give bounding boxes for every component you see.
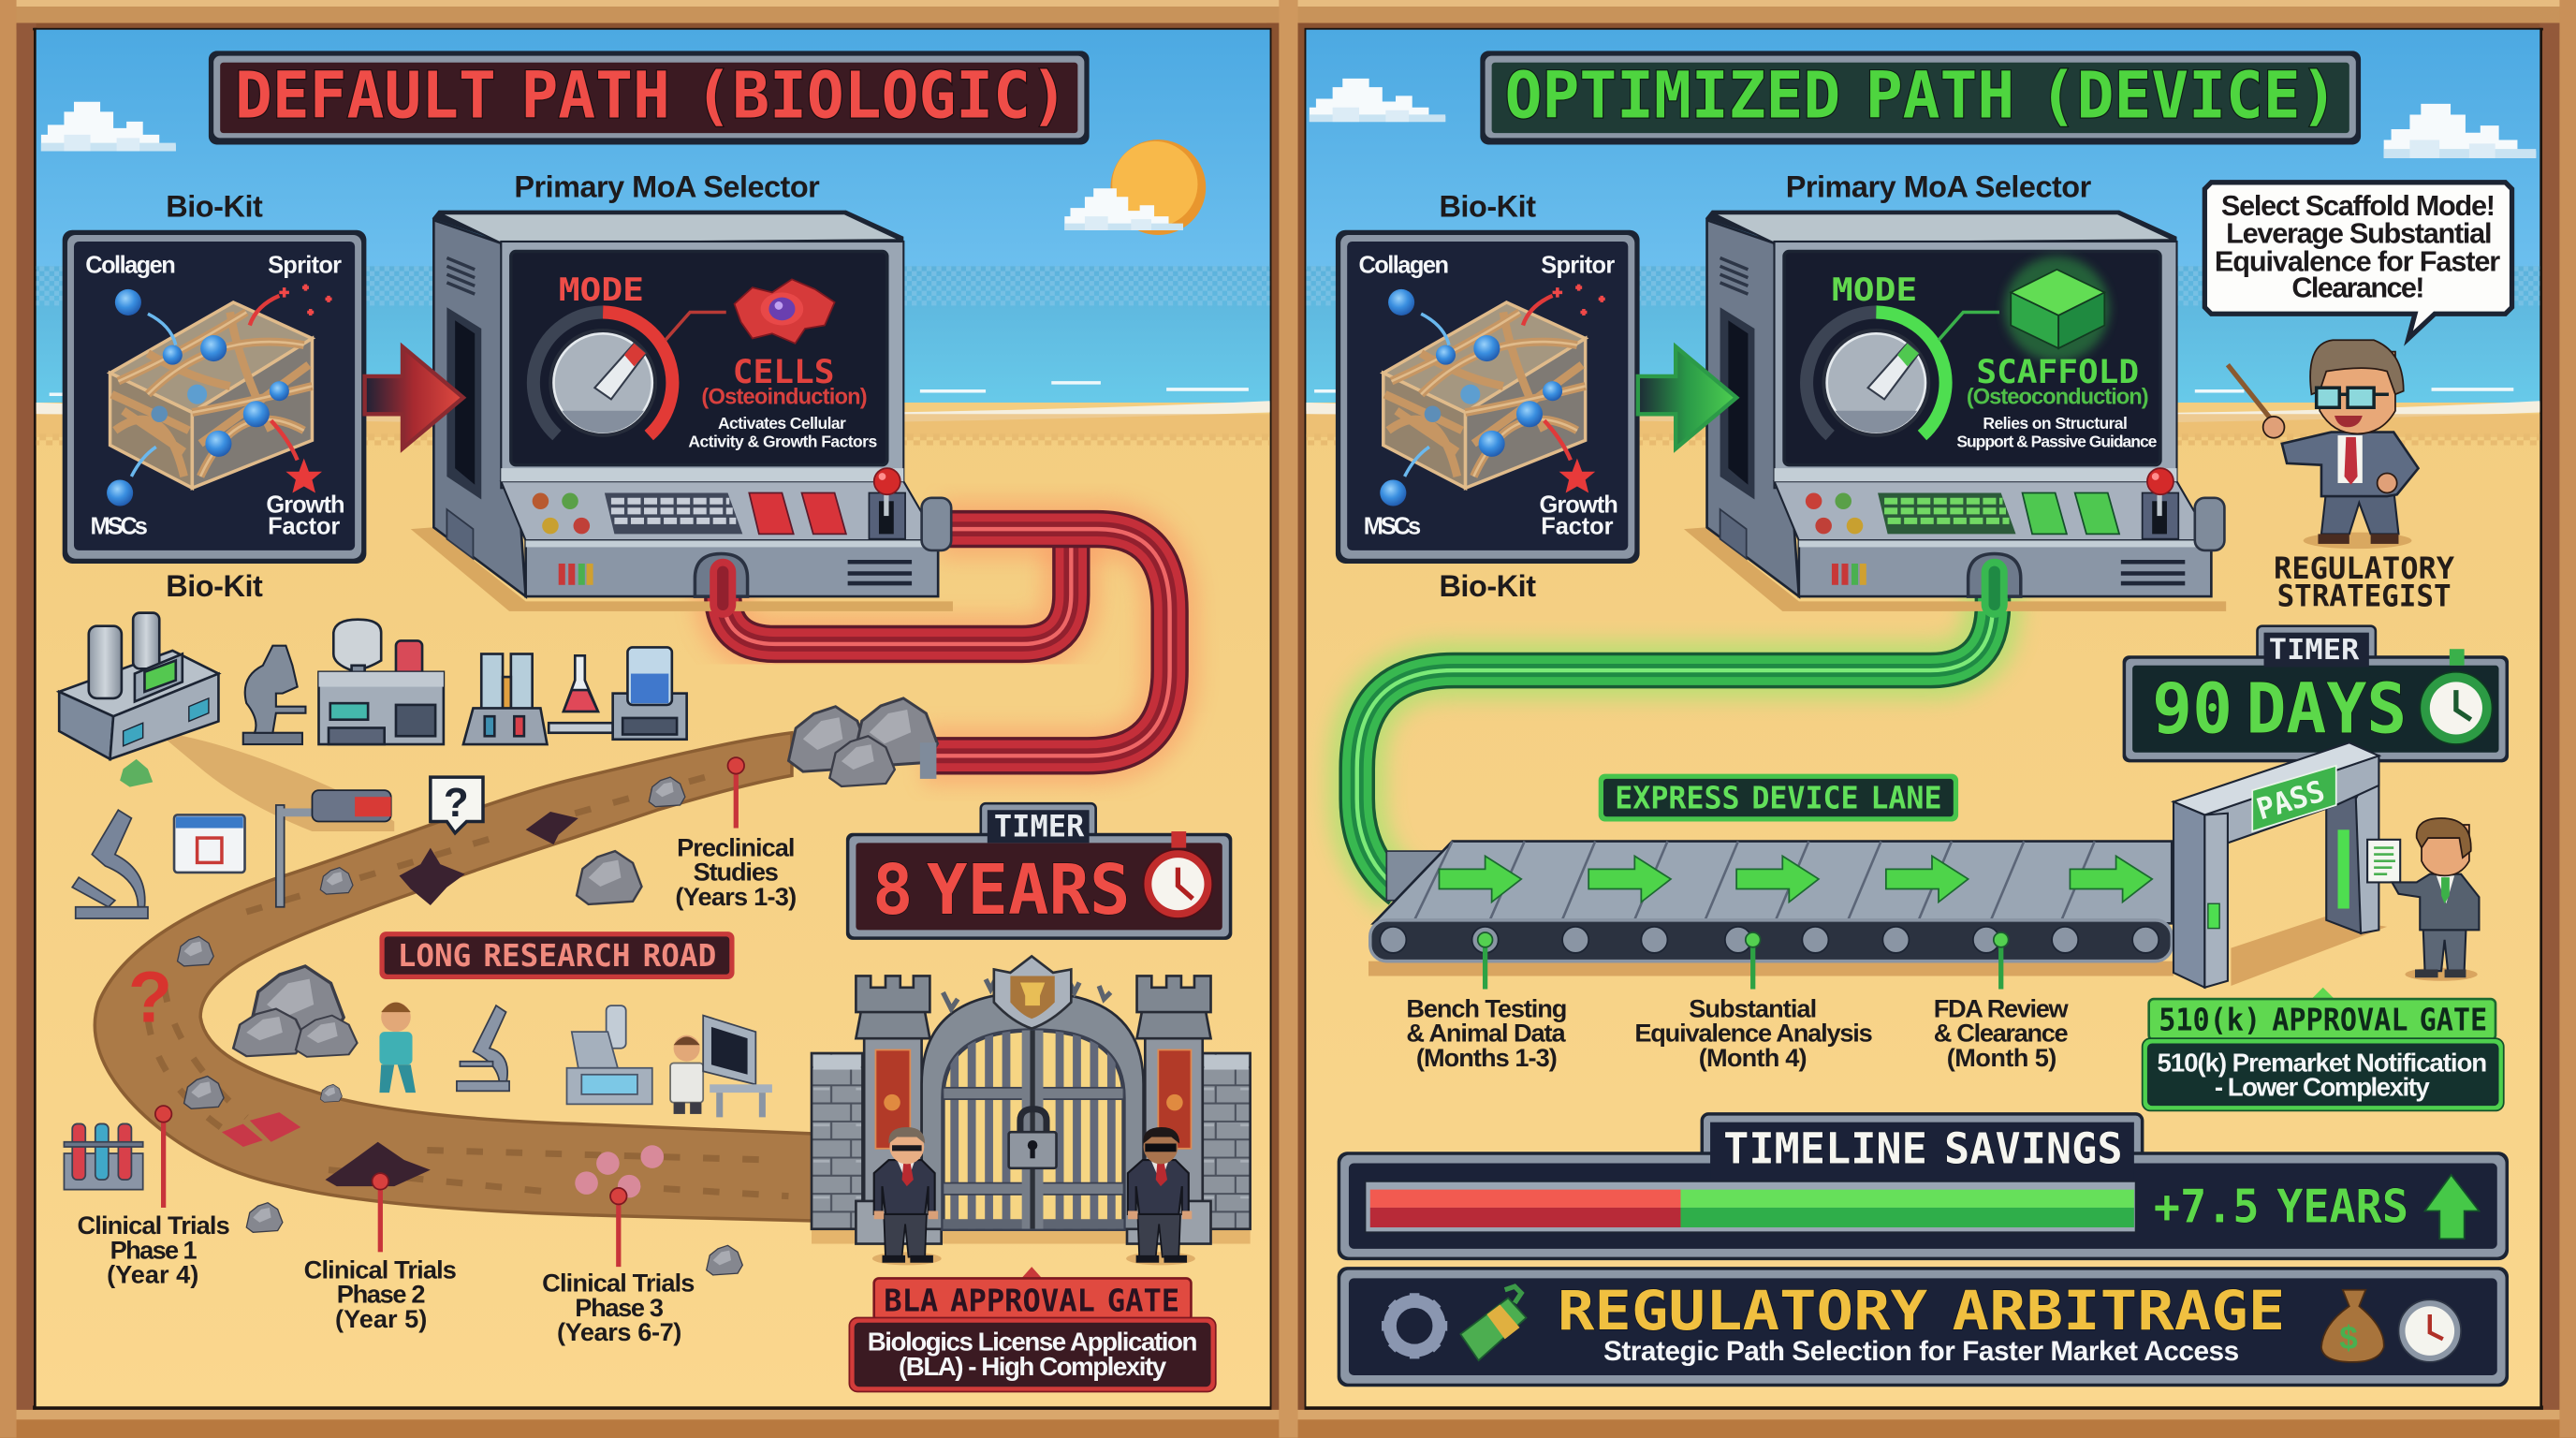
panel: bio-kit components: [63, 230, 366, 564]
panel: optimized path (device): [1306, 30, 2539, 1413]
milestone: equivalence: [1634, 932, 1873, 1072]
callout: strategist speech bubble: Equivalence for Faster: [2215, 245, 2500, 278]
label: 510(k) approval gate: 510(k) APPROVAL GATE: [2159, 1001, 2487, 1037]
arrow: kit to selector green: [1638, 346, 1736, 448]
callout: 510(k) description: - Lower Complexity: [2215, 1073, 2430, 1102]
milestone: equivalence: Substantial: [1689, 993, 1817, 1022]
timer: 8 years: 8 YEARS: [872, 851, 1131, 931]
callout: strategist speech bubble: [2204, 183, 2512, 339]
milestone: FDA review: & Clearance: [1934, 1019, 2069, 1048]
pipe: green tubing: [1357, 575, 1993, 890]
background: sand: [37, 401, 1270, 1413]
screen: Osteoconduction: (Osteoconduction): [1967, 386, 2149, 410]
milestone: phase 2: Phase 2: [337, 1280, 426, 1309]
icon: robotic instrument: [567, 1005, 652, 1104]
milestone: phase 1: (Year 4): [107, 1260, 198, 1289]
panel: bio-kit components: [1336, 230, 1640, 564]
icon: researcher in teal scrubs: [379, 1003, 416, 1093]
label: BLA approval gate: [874, 1267, 1191, 1321]
icon: green stopwatch: [2420, 649, 2492, 744]
screen: Osteoinduction: (Osteoinduction): [701, 386, 868, 410]
small rocks: [178, 777, 742, 1275]
screen: dial arc: [534, 312, 726, 435]
panel: bio-kit components: Spritor: [1541, 252, 1615, 278]
panel: bio-kit components: Growth: [1540, 492, 1618, 519]
controls: lights, keyboard, buttons: [1806, 493, 2119, 534]
icon: green scaffold cube: [2004, 257, 2110, 361]
conveyor arrows: [1439, 856, 2152, 902]
label: Bio-Kit top: Bio-Kit: [166, 190, 263, 224]
icon: question speech bubble: [431, 777, 483, 833]
machine: primary MoA selector (biologic): [411, 211, 953, 611]
controls: lights, keyboard, buttons: [533, 493, 846, 534]
milestone: phase 1: Clinical Trials: [77, 1211, 230, 1240]
label: regulatory strategist: STRATEGIST: [2277, 580, 2452, 614]
callout: BLA description: [849, 1318, 1216, 1392]
screen: description: Support & Passive Guidance: [1956, 432, 2158, 450]
callout: strategist speech bubble: Clearance!: [2291, 271, 2425, 304]
icon: up arrow: [2425, 1175, 2479, 1239]
panel: default path (biologic): [37, 30, 1270, 1413]
label: BLA approval gate: BLA APPROVAL GATE: [884, 1283, 1179, 1319]
label: 510(k) approval gate: [2149, 988, 2496, 1040]
cloud left: [41, 102, 176, 151]
cloud left: [1310, 79, 1445, 122]
screen: SCAFFOLD: SCAFFOLD: [1976, 353, 2139, 391]
milestone: phase 3: [542, 1188, 695, 1346]
timer: 8 years: [846, 803, 1232, 940]
screen: description: [688, 414, 877, 450]
road holes: [326, 812, 578, 1186]
icon: money bag: $: [2339, 1320, 2358, 1357]
icon: guard left: [872, 1127, 942, 1265]
icon: gate shield crest: [994, 956, 1071, 1029]
milestone: preclinical: [675, 757, 797, 911]
icon: survey signpost with camera: [276, 790, 391, 907]
lab glassware: [463, 654, 613, 744]
milestone: equivalence: (Month 4): [1699, 1043, 1808, 1072]
text: strategic subtitle: Strategic Path Selection for Faster Market Access: [1603, 1336, 2239, 1367]
callout: strategist speech bubble: Select Scaffold Mode!: [2221, 189, 2496, 222]
icon: boulders: [233, 966, 358, 1057]
background: sky: [37, 30, 1270, 270]
label: Bio-Kit bottom: Bio-Kit: [1439, 569, 1536, 603]
arrow: kit to selector red: [365, 346, 463, 448]
milestone: FDA review: (Month 5): [1947, 1043, 2056, 1072]
label: Primary MoA Selector: Primary MoA Selector: [1786, 170, 2092, 204]
road branch near lab: [156, 731, 394, 831]
panel: bio-kit components: Spritor: [268, 252, 342, 278]
progress bar: [1365, 1181, 2136, 1232]
heading: regulatory arbitrage: REGULATORY ARBITRAGE: [1558, 1279, 2285, 1343]
panel: bio-kit components: Collagen: [1358, 252, 1449, 278]
milestone: phase 3: Clinical Trials: [542, 1268, 695, 1297]
icon: microscope small: [457, 1005, 509, 1091]
label: Bio-Kit top: Bio-Kit: [1439, 190, 1536, 224]
callout: 510(k) description: [2143, 1038, 2504, 1110]
milestone: preclinical: Studies: [694, 858, 779, 887]
panel: bio-kit components: MSCs: [91, 513, 148, 539]
milestone: FDA review: [1934, 932, 2070, 1072]
milestone: phase 1: Phase 1: [110, 1235, 198, 1264]
lab factory: [59, 613, 218, 759]
timer: 8 years: TIMER: [994, 810, 1085, 844]
milestone: bench testing: & Animal Data: [1406, 1019, 1566, 1048]
rock pile at pipe outlet: [788, 698, 937, 786]
callout: strategist speech bubble: Leverage Substantial: [2226, 217, 2492, 250]
label: regulatory strategist: [2274, 552, 2454, 614]
timer: 90 days: 90 DAYS: [2152, 670, 2407, 750]
milestone: phase 2: [304, 1173, 457, 1333]
panel: bio-kit components: Factor: [1541, 513, 1614, 539]
panel: regulatory arbitrage: [1338, 1267, 2509, 1387]
screen: description: Activates Cellular: [718, 414, 846, 433]
screen: description: [1956, 414, 2158, 450]
panel: timeline savings: [1338, 1114, 2509, 1260]
gate: PASS arch: [2174, 742, 2387, 988]
banner: express device lane: EXPRESS DEVICE LANE: [1615, 779, 1942, 815]
lab analyser machine: [318, 620, 444, 744]
panel: bio-kit components: Growth: [266, 492, 345, 519]
character: inspector with clipboard: [2367, 818, 2479, 981]
conveyor belt: [1368, 842, 2174, 976]
castle: BLA gate: [812, 956, 1251, 1265]
milestone: phase 3: (Years 6-7): [557, 1317, 681, 1346]
machine: primary MoA selector (device): [1684, 211, 2226, 611]
small green bush: [120, 759, 153, 787]
icon: padlock: [1009, 1109, 1057, 1168]
label: Primary MoA Selector: Primary MoA Selector: [514, 170, 820, 204]
milestone: preclinical: Preclinical: [677, 832, 795, 861]
callout: BLA description: (BLA) - High Complexity: [899, 1352, 1167, 1381]
milestone: FDA review: FDA Review: [1934, 993, 2070, 1022]
milestone: phase 2: (Year 5): [335, 1304, 427, 1333]
icon: cell: [735, 279, 835, 344]
icon: money bag: [2321, 1290, 2384, 1362]
icon: guard right: [1126, 1127, 1195, 1265]
icon: scientist at computer: [670, 1016, 772, 1117]
panel: bio-kit components: MSCs: [1364, 513, 1421, 539]
heading: optimized path title: OPTIMIZED PATH (DEVICE): [1505, 58, 2338, 133]
milestone: phase 2: Clinical Trials: [304, 1255, 457, 1284]
icon: clock: [2398, 1299, 2461, 1362]
label: regulatory strategist: REGULATORY: [2274, 552, 2454, 586]
callout: 510(k) description: 510(k) Premarket Notification: [2157, 1048, 2487, 1077]
background: sky: [1306, 30, 2539, 270]
background: sea: [37, 266, 1270, 411]
obstacles: pink blobs: [575, 1145, 664, 1197]
milestone: equivalence: Equivalence Analysis: [1634, 1019, 1873, 1048]
cloud right: [2384, 104, 2536, 158]
heading: timeline savings: TIMELINE SAVINGS: [1723, 1124, 2123, 1174]
screen: description: Relies on Structural: [1983, 414, 2128, 433]
milestone: bench testing: [1406, 932, 1567, 1072]
panel: bio-kit components: Collagen: [85, 252, 176, 278]
icon: test tubes: [64, 1123, 143, 1190]
stat: +7.5 years: +7.5 YEARS: [2154, 1180, 2408, 1234]
milestone: preclinical: (Years 1-3): [675, 882, 797, 911]
research road: [95, 733, 813, 1221]
milestone: bench testing: Bench Testing: [1406, 993, 1567, 1022]
icon: microscope: [72, 810, 148, 918]
label: Bio-Kit bottom: Bio-Kit: [166, 569, 263, 603]
banner: long research road: LONG RESEARCH ROAD: [398, 937, 716, 974]
callout: BLA description: Biologics License Application: [868, 1328, 1197, 1357]
sign: PASS: PASS: [2253, 774, 2329, 827]
icon: red stopwatch: [1144, 831, 1212, 918]
background: sand: [1306, 401, 2539, 1413]
icon: calendar: [174, 814, 245, 873]
heading: default path title: DEFAULT PATH (BIOLOGIC): [235, 58, 1068, 133]
screen: CELLS: CELLS: [733, 353, 835, 391]
milestone: phase 1: [77, 1106, 230, 1289]
milestone: phase 3: Phase 3: [575, 1293, 664, 1322]
sun: [1110, 139, 1206, 235]
background: sea: [1306, 266, 2539, 411]
lab water device: [613, 647, 687, 740]
milestone: bench testing: (Months 1-3): [1416, 1043, 1558, 1072]
pipe: red tubing: [723, 529, 1170, 756]
icon: cash stack: [1460, 1286, 1526, 1360]
screen: description: Activity & Growth Factors: [688, 432, 877, 450]
icon: red question mark: ?: [128, 958, 172, 1038]
timer: 90 days: [2123, 626, 2509, 762]
icon: gear: [1382, 1293, 1447, 1358]
screen: MODE label: MODE: [559, 271, 644, 309]
screen: MODE label: MODE: [1832, 271, 1917, 309]
icon: question speech bubble: ?: [444, 780, 469, 826]
timer: 90 days: TIMER: [2269, 634, 2359, 667]
obstacles: red patches: [222, 1112, 300, 1147]
panel: bio-kit components: Factor: [268, 513, 340, 539]
cloud right: [1064, 188, 1183, 230]
lab microscope: [243, 646, 305, 744]
screen: dial arc: [1807, 312, 1999, 435]
character: regulatory strategist: [2228, 340, 2419, 549]
